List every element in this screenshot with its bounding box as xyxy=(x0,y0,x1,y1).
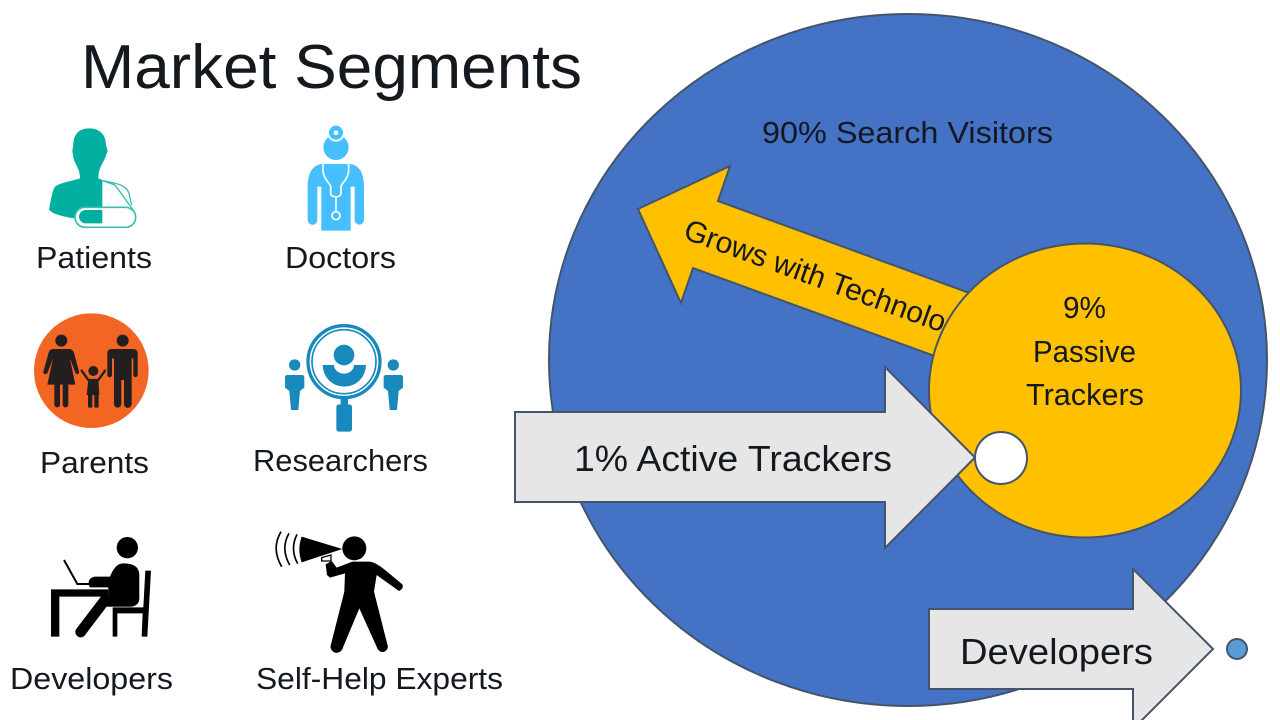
label: Developers: Developers xyxy=(10,661,173,696)
icon: developer at laptop xyxy=(51,537,151,637)
icon: family of parents and child xyxy=(34,313,149,428)
arrow: grows with technology: Grows with Technology xyxy=(680,214,980,350)
circle: passive trackers: 9% xyxy=(1063,290,1106,325)
arrow: active trackers: 1% Active Trackers xyxy=(574,438,892,479)
label: Parents: Parents xyxy=(40,445,149,480)
label: 90% Search Visitors: 90% Search Visitors xyxy=(762,115,1053,150)
circle: passive trackers: Trackers xyxy=(1026,377,1144,412)
arrow: developers: Developers xyxy=(960,631,1153,672)
circle: search visitors xyxy=(549,14,1267,706)
arrow: developers xyxy=(929,569,1213,720)
panel: market segments list xyxy=(10,125,503,696)
icon: patient with arm sling xyxy=(49,128,136,227)
icon: self-help expert with megaphone xyxy=(276,532,403,653)
panel: audience circle diagram xyxy=(515,14,1267,720)
label: Doctors: Doctors xyxy=(285,240,396,275)
label: Self-Help Experts: Self-Help Experts xyxy=(256,661,503,696)
arrow: grows with technology xyxy=(638,166,980,358)
circle: active trackers dot xyxy=(975,432,1027,484)
circle: developers dot xyxy=(1227,639,1247,659)
label: Patients: Patients xyxy=(36,240,152,275)
arrow: active trackers xyxy=(515,367,975,548)
title: Market Segments xyxy=(81,33,582,102)
circle: passive trackers xyxy=(929,244,1241,538)
icon: doctor with stethoscope xyxy=(308,125,364,231)
icon: researchers under magnifying glass xyxy=(285,326,403,432)
label: Researchers: Researchers xyxy=(253,443,428,478)
circle: passive trackers: Passive xyxy=(1033,334,1136,369)
